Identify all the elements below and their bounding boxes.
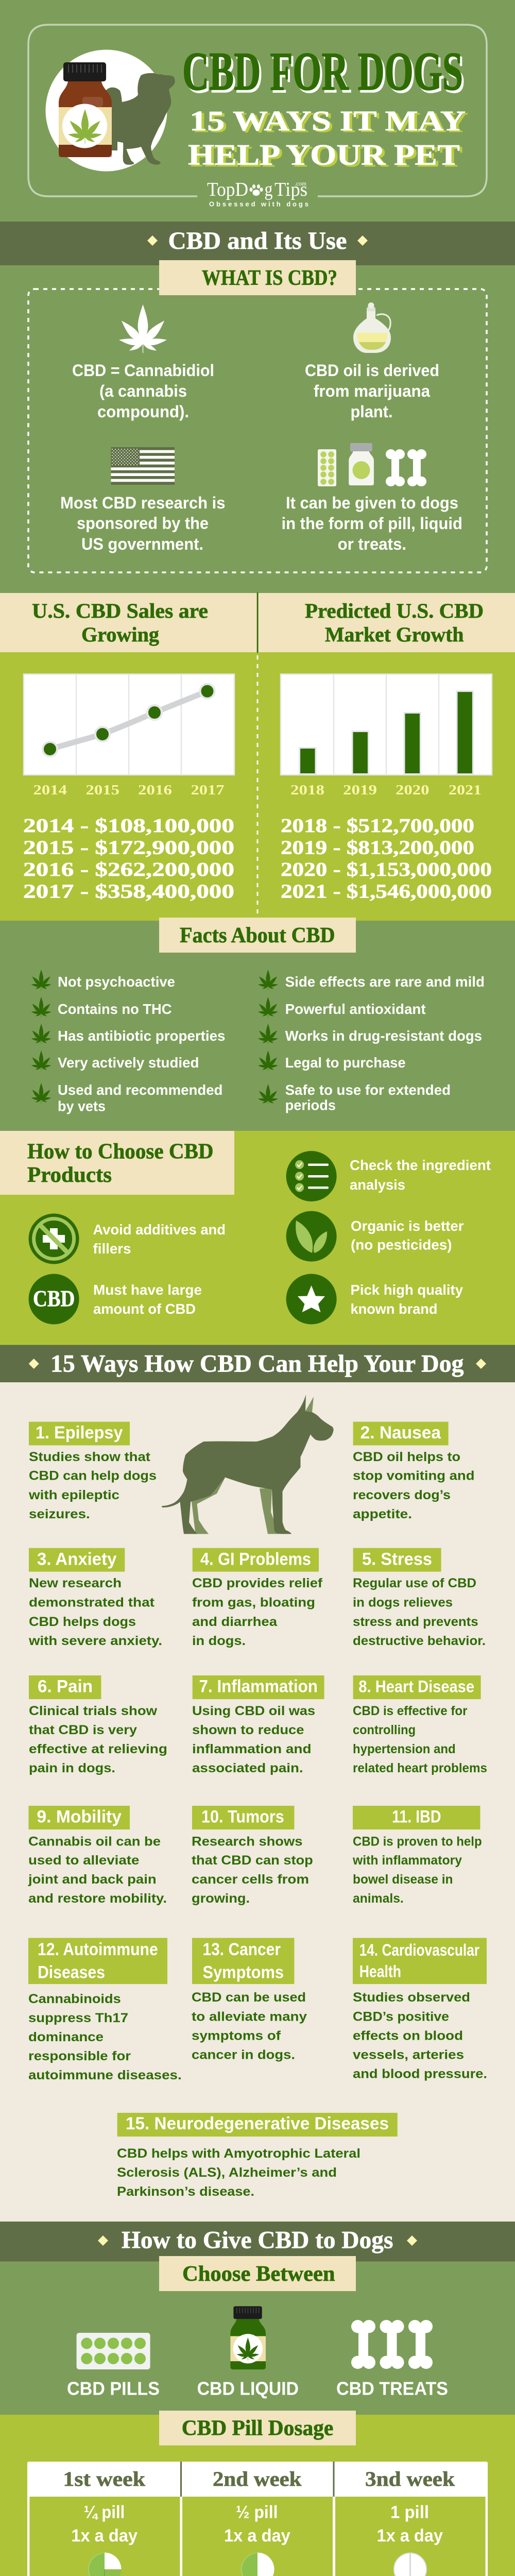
pill amounts: [71, 2503, 443, 2546]
labels: CBD forms: CBD TREATS: [336, 2378, 448, 2399]
card: 12 autoimmune diseases: responsible for: [28, 2049, 131, 2063]
sales values: 2016 - $262,200,000: [23, 859, 234, 880]
logo: g: [265, 179, 273, 200]
bottle: [59, 62, 112, 157]
hero illustration: bottle and dog: [45, 49, 175, 171]
card: 15 neurodegenerative diseases: [117, 2113, 398, 2199]
card: 11 IBD: 11. IBD: [392, 1807, 441, 1827]
card: 8 heart disease: controlling: [353, 1723, 416, 1737]
card: 5 stress: [353, 1548, 486, 1648]
card: 10 tumors: that CBD can stop: [192, 1853, 313, 1868]
card: 11 IBD: [352, 1806, 482, 1906]
text: facts right column: Works in drug-resistant dogs: [285, 1028, 482, 1044]
card: 2 nausea: stop vomiting and: [353, 1469, 475, 1483]
text: forms of CBD: or treats.: [338, 535, 406, 553]
text: derived from marijuana: from marijuana: [314, 382, 430, 400]
card: 7 inflammation: inflammation and: [192, 1742, 312, 1756]
text: facts right column: [285, 974, 485, 1113]
card: 12 autoimmune diseases: dominance: [28, 2030, 104, 2044]
card: 11 IBD: CBD is proven to help: [353, 1834, 482, 1849]
text: facts right column: Powerful antioxidant: [285, 1001, 426, 1017]
heading: predicted growth: [305, 599, 484, 646]
text: facts left column: by vets: [58, 1098, 106, 1114]
card: 4 GI problems: in dogs.: [192, 1634, 246, 1648]
text: facts left column: Very actively studied: [58, 1055, 199, 1071]
card: 3 anxiety: demonstrated that: [29, 1596, 155, 1610]
logo: TopD: [207, 179, 248, 200]
card: 13 cancer symptoms: [192, 1938, 307, 2062]
icon: oil jug: [353, 302, 391, 353]
text: facts right column: Side effects are rare and mild: [285, 974, 485, 990]
card: 9 mobility: [28, 1806, 167, 1906]
panel: pill dosage: [27, 2411, 488, 2576]
card: 12 autoimmune diseases: Cannabinoids: [28, 1992, 121, 2006]
market values: 2019 - $813,200,000: [281, 837, 474, 858]
table headers: [63, 2467, 455, 2490]
card: 5 stress: 5. Stress: [362, 1550, 432, 1569]
text: facts left column: Has antibiotic properties: [58, 1028, 226, 1044]
card: 2 nausea: CBD oil helps to: [353, 1450, 460, 1464]
card: 4 GI problems: CBD provides relief: [192, 1576, 323, 1590]
card: 3 anxiety: 3. Anxiety: [37, 1550, 116, 1569]
text: forms of CBD: [281, 494, 462, 553]
text: CBD definition: [72, 361, 214, 421]
panel: choose between: [67, 2256, 448, 2399]
card: 5 stress: destructive behavior.: [353, 1634, 486, 1648]
pill amounts: ½ pill: [236, 2503, 278, 2522]
card: 13 cancer symptoms: cancer in dogs.: [192, 2047, 295, 2062]
title: HELP YOUR PET: [191, 141, 462, 173]
text: research sponsorship: [60, 494, 226, 553]
card: 9 mobility: joint and back pain: [28, 1872, 157, 1887]
chart axis years: [290, 782, 482, 798]
card: 3 anxiety: [28, 1548, 162, 1648]
card: 6 pain: Clinical trials show: [29, 1704, 158, 1718]
card: 4 GI problems: and diarrhea: [192, 1615, 278, 1629]
card: 7 inflammation: [192, 1675, 324, 1775]
card: 11 IBD: animals.: [353, 1891, 404, 1906]
card: 8 heart disease: 8. Heart Disease: [358, 1677, 474, 1696]
icons: leaf bullets: [31, 970, 278, 1105]
chart axis years: 2015: [85, 782, 119, 798]
card: 12 autoimmune diseases: 12. Autoimmune: [38, 1940, 158, 1959]
card: 8 heart disease: [353, 1675, 487, 1775]
market values: 2020 - $1,153,000,000: [281, 859, 492, 880]
icon: pills, bottle and bones: [318, 443, 426, 486]
text: ingredient analysis: analysis: [350, 1177, 405, 1193]
icon: whole pill: [394, 2553, 426, 2576]
pill amounts: 1x a day: [224, 2526, 290, 2546]
sales values: 2017 - $358,400,000: [23, 881, 234, 903]
text: large amount of CBD: Must have large: [93, 1282, 202, 1298]
panel: how to choose CBD products: [0, 1131, 491, 1324]
text: facts left column: Used and recommended: [58, 1082, 222, 1098]
illustration: standing dog: [162, 1395, 334, 1534]
card: 12 autoimmune diseases: autoimmune diseases.: [28, 2068, 182, 2082]
table headers: 2nd week: [213, 2467, 302, 2490]
chart axis years: [33, 782, 225, 798]
text: CBD definition: CBD = Cannabidiol: [72, 361, 214, 380]
text: large amount of CBD: [93, 1282, 202, 1317]
heading: choose between: [159, 2256, 356, 2291]
card: 9 mobility: used to alleviate: [28, 1853, 139, 1868]
text: known brand: known brand: [350, 1301, 438, 1317]
pill amounts: ¼ pill: [84, 2503, 125, 2522]
chart axis years: 2014: [33, 782, 67, 798]
card: 2 nausea: 2. Nausea: [360, 1423, 441, 1443]
table headers: 3nd week: [365, 2467, 455, 2490]
icon: US flag: [111, 447, 175, 485]
market values: 2018 - $512,700,000: [281, 815, 474, 837]
logo: .com: [295, 180, 307, 187]
heading: predicted growth: Market Growth: [325, 623, 464, 646]
card: 14 cardiovascular health: Studies observed: [353, 1990, 470, 2005]
card: 2 nausea: recovers dog’s: [353, 1488, 451, 1502]
text: ingredient analysis: [350, 1157, 491, 1193]
labels: CBD forms: CBD LIQUID: [197, 2378, 299, 2399]
labels: CBD forms: CBD PILLS: [67, 2378, 160, 2399]
icon: CBD badge: CBD: [33, 1286, 75, 1311]
card: 9 mobility: Cannabis oil can be: [28, 1834, 161, 1849]
card: 8 heart disease: related heart problems: [353, 1761, 487, 1775]
heading: choose between: Choose Between: [182, 2262, 335, 2286]
card: 2 nausea: appetite.: [353, 1507, 412, 1521]
card: 4 GI problems: 4. GI Problems: [200, 1550, 311, 1569]
card: 1 epilepsy: seizures.: [29, 1507, 90, 1521]
chart axis years: 2020: [396, 782, 430, 798]
card: 15 neurodegenerative diseases: 15. Neurodegenerative Diseases: [126, 2114, 389, 2133]
card: 13 cancer symptoms: 13. Cancer: [203, 1940, 281, 1959]
text: avoid additives: [93, 1222, 226, 1257]
pill amounts: 1 pill: [390, 2503, 429, 2522]
hero panel: [28, 25, 487, 208]
card: 14 cardiovascular health: vessels, arteries: [353, 2047, 464, 2062]
title: 15 WAYS IT MAY: [192, 107, 468, 138]
card: 3 anxiety: CBD helps dogs: [29, 1615, 136, 1629]
card: 13 cancer symptoms: symptoms of: [192, 2029, 281, 2043]
logo: Obsessed with dogs: [209, 200, 308, 208]
card: 8 heart disease: CBD is effective for: [353, 1704, 468, 1718]
card: 10 tumors: [192, 1806, 313, 1906]
text: derived from marijuana: [305, 361, 439, 421]
heading: how to choose: Products: [27, 1163, 112, 1187]
text: research sponsorship: US government.: [81, 535, 203, 553]
card: 9 mobility: 9. Mobility: [37, 1807, 122, 1827]
heading: what is CBD: WHAT IS CBD?: [202, 266, 337, 290]
card: 13 cancer symptoms: Symptoms: [203, 1962, 284, 1982]
card: 1 epilepsy: 1. Epilepsy: [36, 1423, 123, 1443]
line chart: [24, 674, 234, 775]
icon: checklist: [286, 1151, 337, 1201]
market values: [281, 815, 492, 903]
divider between the sales columns: [257, 592, 259, 918]
chart axis years: 2016: [138, 782, 172, 798]
text: facts left column: Not psychoactive: [58, 974, 175, 990]
text: avoid additives: fillers: [93, 1241, 131, 1257]
text: forms of CBD: in the form of pill, liquid: [281, 514, 462, 533]
card: 2 nausea: [353, 1422, 475, 1521]
text: facts left column: Contains no THC: [58, 1001, 172, 1017]
card: 12 autoimmune diseases: [28, 1938, 182, 2082]
card: 14 cardiovascular health: 14. Cardiovascular: [359, 1941, 479, 1959]
section heading: CBD and Its Use: CBD and Its Use: [168, 227, 347, 255]
card: 11 IBD: with inflammatory: [352, 1853, 462, 1868]
card: 15 neurodegenerative diseases: Sclerosis (ALS), Alzheimer’s and: [117, 2165, 337, 2180]
card: 8 heart disease: hypertension and: [353, 1742, 456, 1756]
text: research sponsorship: Most CBD research is: [60, 494, 226, 512]
card: 6 pain: 6. Pain: [38, 1677, 93, 1697]
card: 1 epilepsy: [28, 1422, 157, 1521]
sales values: 2014 - $108,100,000: [23, 815, 234, 837]
card: 14 cardiovascular health: [353, 1938, 487, 2081]
text: facts right column: Safe to use for extended: [285, 1082, 451, 1098]
card: 5 stress: in dogs relieves: [353, 1596, 453, 1610]
card: 3 anxiety: with severe anxiety.: [28, 1634, 162, 1648]
card: 1 epilepsy: CBD can help dogs: [29, 1469, 157, 1483]
text: research sponsorship: sponsored by the: [77, 514, 209, 533]
heading: pill dosage: CBD Pill Dosage: [182, 2416, 333, 2440]
heading: facts about CBD: [159, 918, 356, 953]
sales values: [23, 815, 234, 903]
text: facts right column: periods: [285, 1097, 336, 1113]
heading: how to choose: [0, 1131, 234, 1195]
chart axis years: 2017: [191, 782, 225, 798]
text: organic: Organic is better: [351, 1218, 464, 1234]
icon: white cannabis leaf: [118, 304, 167, 353]
card: 14 cardiovascular health: effects on blood: [353, 2029, 463, 2043]
heading: sales growing: U.S. CBD Sales are: [32, 599, 208, 622]
table headers: 1st week: [63, 2467, 146, 2490]
card: 9 mobility: and restore mobility.: [28, 1891, 167, 1906]
icon: organic leaves: [286, 1211, 337, 1262]
card: 5 stress: stress and prevents: [353, 1615, 478, 1629]
card: 10 tumors: cancer cells from: [192, 1872, 309, 1887]
card: 1 epilepsy: with epileptic: [28, 1488, 119, 1502]
card: 6 pain: [29, 1675, 167, 1775]
text: CBD definition: compound).: [97, 402, 189, 421]
card: 7 inflammation: Using CBD oil was: [192, 1704, 315, 1718]
card: 10 tumors: 10. Tumors: [201, 1807, 284, 1827]
card: 7 inflammation: associated pain.: [192, 1761, 303, 1775]
text: known brand: [350, 1282, 463, 1317]
card: 13 cancer symptoms: CBD can be used: [192, 1990, 306, 2005]
labels: CBD forms: [67, 2378, 448, 2399]
icon: CBD badge: [29, 1274, 79, 1324]
logo: [207, 179, 308, 208]
icon: green liquid bottle: [230, 2306, 266, 2369]
card: 10 tumors: Research shows: [192, 1834, 302, 1849]
market values: 2021 - $1,546,000,000: [281, 881, 492, 903]
heading: what is CBD: [159, 260, 356, 295]
icon: half pill: [241, 2552, 274, 2576]
card: 14 cardiovascular health: and blood pressure.: [353, 2067, 487, 2081]
icon: three bones: [351, 2320, 433, 2369]
title: [182, 41, 468, 173]
heading: pill dosage: [159, 2411, 356, 2445]
panel: what is CBD: [28, 260, 487, 572]
text: facts right column: Legal to purchase: [285, 1055, 406, 1071]
card: 13 cancer symptoms: to alleviate many: [192, 2009, 307, 2024]
card: 6 pain: pain in dogs.: [29, 1761, 115, 1775]
icon: star: [286, 1274, 337, 1324]
bar chart: [281, 674, 492, 775]
card: 7 inflammation: shown to reduce: [192, 1723, 304, 1737]
heading: predicted growth: Predicted U.S. CBD: [305, 599, 484, 622]
heading: how to choose: How to Choose CBD: [27, 1140, 213, 1163]
heading: sales growing: [32, 599, 208, 646]
card: 5 stress: Regular use of CBD: [353, 1576, 476, 1590]
panel: predicted market growth: [281, 599, 492, 903]
panel: US CBD sales: [23, 599, 234, 903]
card: 11 IBD: bowel disease in: [353, 1872, 453, 1887]
card: 12 autoimmune diseases: Diseases: [38, 1962, 105, 1982]
text: derived from marijuana: CBD oil is derived: [305, 361, 439, 380]
text: ingredient analysis: Check the ingredient: [350, 1157, 491, 1173]
card: 4 GI problems: [192, 1548, 323, 1648]
section heading: how to give CBD: How to Give CBD to Dogs: [122, 2227, 393, 2254]
text: CBD definition: (a cannabis: [99, 382, 187, 400]
card: 3 anxiety: New research: [29, 1576, 122, 1590]
card: 15 neurodegenerative diseases: CBD helps with Amyotrophic Lateral: [117, 2146, 360, 2161]
sales values: 2015 - $172,900,000: [23, 837, 234, 858]
title: HELP YOUR PET: [188, 139, 460, 171]
chart axis years: 2018: [290, 782, 324, 798]
icon: quarter pill: [88, 2552, 122, 2576]
icon: pill blister pack: [77, 2333, 150, 2369]
text: avoid additives: Avoid additives and: [93, 1222, 226, 1238]
table frame: [27, 2462, 488, 2576]
card: 12 autoimmune diseases: suppress Th17: [28, 2011, 128, 2025]
text: organic: (no pesticides): [351, 1236, 452, 1253]
card: 14 cardiovascular health: Health: [359, 1962, 401, 1980]
panel: facts about CBD: [31, 918, 485, 1114]
card: 15 neurodegenerative diseases: Parkinson’s disease.: [117, 2184, 254, 2199]
card: 6 pain: that CBD is very: [29, 1723, 137, 1737]
text: known brand: Pick high quality: [350, 1282, 463, 1298]
text: large amount of CBD: amount of CBD: [93, 1301, 196, 1317]
heading: sales growing: Growing: [81, 623, 159, 646]
pill amounts: 1x a day: [71, 2526, 138, 2546]
card: 1 epilepsy: Studies show that: [29, 1450, 151, 1464]
text: organic: [351, 1218, 464, 1253]
card: 6 pain: effective at relieving: [29, 1742, 167, 1756]
chart axis years: 2021: [449, 782, 482, 798]
card: 7 inflammation: 7. Inflammation: [199, 1677, 318, 1697]
text: derived from marijuana: plant.: [350, 402, 392, 421]
chart axis years: 2019: [343, 782, 377, 798]
section heading: 15 ways: 15 Ways How CBD Can Help Your Dog: [50, 1350, 464, 1378]
icon: no additives: [29, 1214, 79, 1264]
text: facts left column: [58, 974, 226, 1114]
logo: Tips: [274, 179, 307, 200]
card: 10 tumors: growing.: [192, 1891, 250, 1906]
card: 14 cardiovascular health: CBD’s positive: [353, 2009, 449, 2024]
card: 4 GI problems: from gas, bloating: [192, 1596, 315, 1610]
title: 15 WAYS IT MAY: [190, 105, 466, 137]
heading: facts about CBD: Facts About CBD: [180, 924, 335, 947]
pill amounts: 1x a day: [377, 2526, 443, 2546]
text: forms of CBD: It can be given to dogs: [286, 494, 458, 512]
